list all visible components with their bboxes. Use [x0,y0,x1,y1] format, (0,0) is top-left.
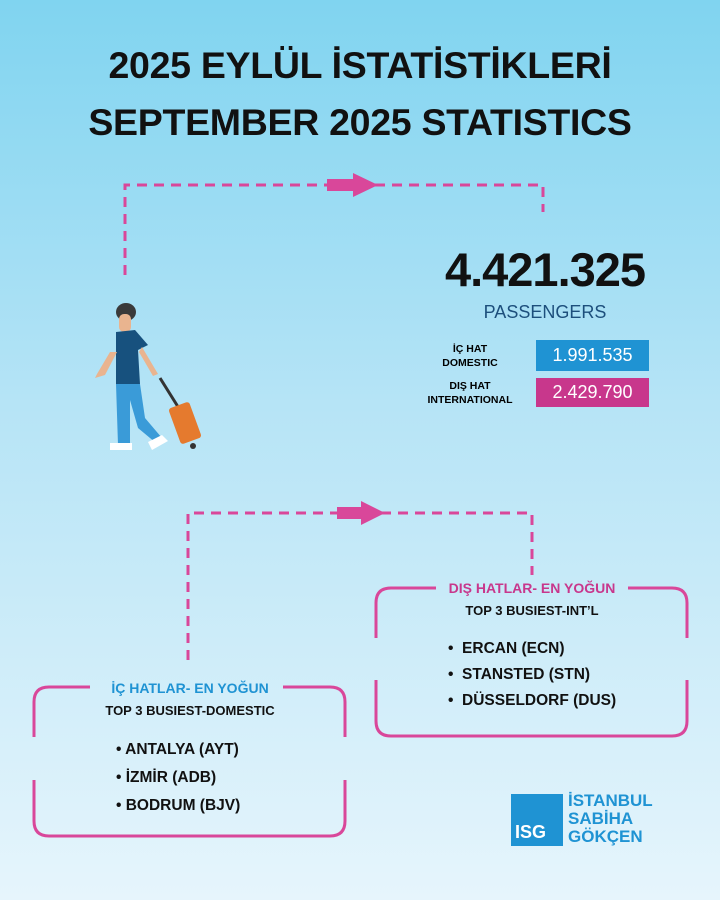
panel: domestic busiest: TOP 3 BUSIEST-DOMESTIC [105,703,275,718]
domestic row: 1.991.535 [552,345,633,365]
domestic row: İÇ HAT [453,343,487,355]
panel: international busiest [448,580,616,709]
logo: İSTANBUL [568,791,653,810]
panel: domestic busiest: İÇ HATLAR- EN YOĞUN [111,680,269,696]
logo: GÖKÇEN [568,827,643,846]
international row: DIŞ HAT [449,380,491,392]
logo: SABİHA [568,809,633,828]
panel: international busiest: • DÜSSELDORF (DUS) [448,692,616,709]
icon: traveler [95,303,201,450]
logo [511,791,653,846]
panel borders [376,588,687,736]
panel: domestic busiest: • BODRUM (BJV) [116,797,240,814]
logo: ISG [515,822,546,842]
title: SEPTEMBER 2025 STATISTICS [88,101,632,143]
domestic row [442,340,649,371]
title: 2025 EYLÜL İSTATİSTİKLERİ [108,44,612,86]
total passengers: 4.421.325 [445,243,645,296]
domestic row: DOMESTIC [442,357,498,369]
panel: domestic busiest: • ANTALYA (AYT) [116,741,239,758]
international row: 2.429.790 [552,382,633,402]
panel: domestic busiest [105,680,275,814]
panel: international busiest: TOP 3 BUSIEST-INT’L [465,603,599,618]
international row [428,378,649,407]
international row: INTERNATIONAL [428,394,512,406]
panel: international busiest: DIŞ HATLAR- EN YOĞUN [449,580,615,596]
panel: domestic busiest: • İZMİR (ADB) [116,769,216,786]
panel: international busiest: • ERCAN (ECN) [448,640,565,657]
passengers label: PASSENGERS [484,302,606,322]
panel: international busiest: • STANSTED (STN) [448,666,590,683]
title [88,44,632,143]
